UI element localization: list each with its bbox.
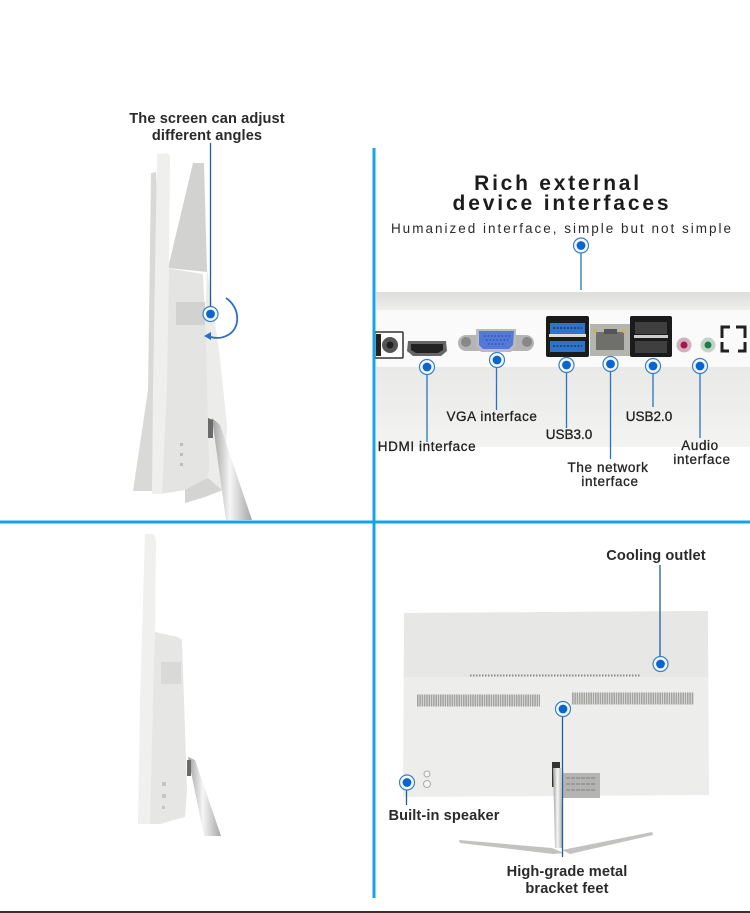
heading: screen angles: The screen can adjust: [129, 111, 285, 127]
callout: VGA: VGA interface: [446, 409, 538, 424]
title: rich external: device interfaces: [453, 192, 671, 215]
callout: audio: Audio: [681, 438, 719, 453]
callout: USB 3.0: USB3.0: [546, 427, 592, 442]
callout: USB 2.0: [626, 358, 672, 424]
callout: USB 2.0: USB2.0: [626, 409, 672, 424]
panel: screen angle adjustment: [129, 111, 285, 520]
port: USB 3.0: [546, 316, 589, 357]
port: network: [590, 324, 631, 356]
panel: side view: [138, 534, 221, 836]
panel: interfaces background: [376, 292, 750, 447]
callout: network: The network: [568, 460, 648, 475]
port: VGA: [458, 329, 534, 352]
rotation arrow: [207, 298, 237, 338]
port: USB 2.0: [630, 316, 672, 357]
callout: built-in speaker: Built-in speaker: [388, 808, 500, 824]
callout: metal bracket: [507, 702, 627, 897]
callout: metal bracket: High-grade metal: [507, 864, 627, 880]
title: rich external: Rich external: [474, 172, 642, 195]
callout: top pin: [574, 238, 588, 290]
left speaker grille: [417, 694, 540, 706]
callout: network: [568, 356, 648, 489]
callout: network: interface: [581, 474, 639, 489]
panel: rear view: [403, 611, 709, 854]
right speaker grille: [572, 692, 694, 704]
callout line and pin: [203, 143, 218, 322]
monitor side view tilted: [133, 153, 252, 520]
callout: metal bracket: bracket feet: [525, 881, 609, 897]
port: HDMI: [407, 341, 447, 356]
port: audio jacks: [676, 338, 716, 352]
stand: [459, 762, 653, 854]
callout: USB 3.0: [546, 358, 592, 442]
rating label: [563, 773, 600, 798]
callout: cooling outlet: [606, 548, 706, 672]
callout: VGA: [446, 352, 538, 424]
callout: audio: interface: [673, 452, 731, 467]
bottom edge: [0, 911, 750, 913]
heading line 2: different angles: [152, 128, 262, 144]
callout: audio: [673, 358, 731, 467]
rear buttons: [424, 771, 430, 788]
port: DC jack: [375, 332, 403, 358]
callout: built-in speaker: [388, 775, 500, 824]
callout: HDMI: [378, 360, 476, 454]
callout: HDMI: HDMI interface: [378, 439, 476, 454]
port: bracket square: [722, 327, 745, 351]
subtitle: Humanized interface, simple but not simple: [391, 221, 733, 236]
title: rich external: [453, 172, 671, 215]
top vent dots: [470, 674, 641, 676]
callout: cooling outlet: Cooling outlet: [606, 548, 706, 564]
